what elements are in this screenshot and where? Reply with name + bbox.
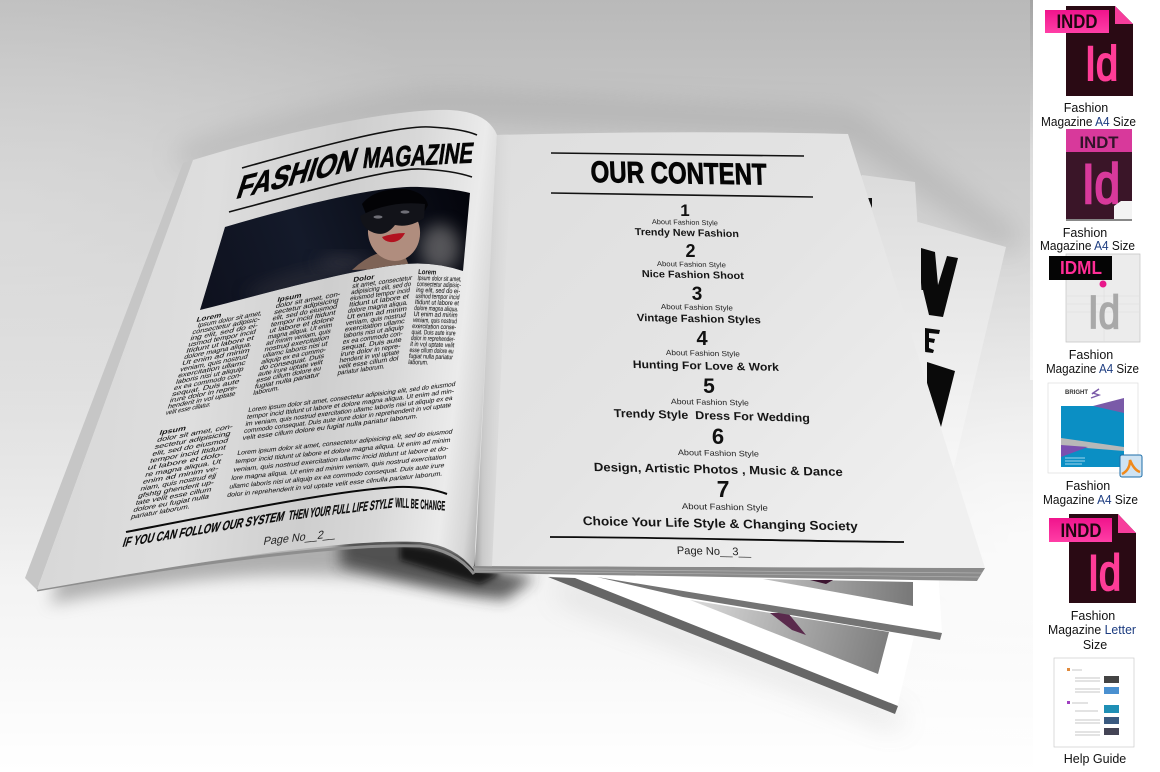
text column 1: Lorem — [195, 311, 223, 324]
text column 2 — [252, 283, 344, 397]
text column 2: tempor incid Itidunt — [270, 310, 336, 329]
text column 5: dolor sit amet, con- — [156, 423, 235, 444]
text column 4: quat. Duis aute irure — [411, 329, 456, 337]
label: IDML A4: Fashion — [1069, 348, 1113, 362]
label: help guide: Help Guide — [1064, 752, 1126, 766]
right page surface — [475, 132, 985, 568]
contents item 3: Vintage Fashion Styles — [637, 312, 761, 326]
text column 2: aute irure uptate velit — [257, 359, 323, 378]
contents item 3 — [637, 284, 761, 326]
contents item 1: Trendy New Fashion — [635, 227, 739, 240]
heading: Our Content: OUR CONTENT — [590, 156, 767, 192]
text column 1: consectetur adipisic- — [191, 316, 262, 336]
contents item 4: About Fashion Style — [666, 348, 740, 358]
text column 3: henderit in vol uptate — [339, 349, 400, 365]
icon: IDML file — [1049, 254, 1140, 342]
paragraph 2: lore magna aliqua. Ut enim ad minim veniam, quis nostrud exercitation — [230, 454, 448, 482]
text column 3: laboris nisi ut aliquip — [343, 324, 404, 340]
icon: PDF brochure — [1048, 383, 1142, 477]
paragraph 1: im veniam, quis nostrud exercitation ullamc laboris nisi ut aliquip ex ea — [245, 395, 454, 428]
icon: INDT file: Id — [1082, 152, 1120, 215]
icon: IDML file: IDML — [1060, 258, 1102, 278]
label: INDD letter: Magazine Letter — [1048, 623, 1136, 637]
text column 4: fugiat nulla pariatur — [409, 353, 454, 361]
heading rules — [551, 153, 804, 156]
drop shadows — [50, 104, 1015, 722]
bottom rule — [550, 537, 904, 542]
file list sidebar — [1040, 6, 1142, 766]
text column 5: enim ad minim ve- — [142, 465, 220, 486]
paragraph 2: tempor incid Itidunt ut labore et dolore magna aliqua. Ut enim ad minim — [235, 437, 451, 465]
text column 4: laborum. — [408, 359, 429, 367]
open magazine right page — [473, 132, 985, 581]
label: INDT A4: Fashion — [1063, 226, 1107, 240]
text column 1: usmod tempor incid — [187, 329, 257, 349]
text column 2: sectetur adipisicing — [273, 297, 340, 316]
tagline: THEN YOUR FULL LIFE STYLE — [287, 496, 394, 523]
contents item 6 — [593, 424, 844, 479]
back magazine: bottom copy — [548, 222, 1006, 714]
icon: help guide — [1054, 658, 1134, 747]
heading: Fashion Magazine: MAGAZINE — [361, 138, 476, 175]
text column 4: dolor in reprehender- — [411, 335, 455, 343]
back magazine: middle copy — [597, 175, 942, 640]
contents item 4: Hunting For Love & Work — [633, 359, 780, 374]
text column 5: elit, sed do eiusmod — [151, 438, 229, 458]
text column 4: consectetur adipisic- — [416, 281, 461, 289]
text column 3: pariatur laborum. — [337, 363, 385, 377]
text column 1: Ut enim ad minim — [181, 347, 251, 367]
text column 4: veniam, quis nostrud — [413, 317, 457, 325]
text column 1: dolore magna aliqua. — [183, 341, 253, 361]
label: INDD A4: Fashion — [1064, 101, 1108, 115]
sidebar background — [1030, 0, 1160, 772]
photo on middle copy — [763, 198, 913, 606]
heading: Fashion Magazine: FASHION — [233, 141, 362, 207]
contents item 4: 4 — [696, 328, 708, 350]
contents item 2: Nice Fashion Shoot — [642, 269, 745, 282]
photo: masked woman — [200, 186, 470, 310]
contents item 6: About Fashion Style — [678, 448, 760, 459]
text column 5: Ipsum — [158, 424, 188, 437]
text column 1: irure dolor in repre- — [169, 385, 239, 404]
text column 1 — [165, 302, 266, 417]
photo on bottom copy — [690, 600, 889, 674]
paragraph 1 — [242, 381, 456, 442]
text column 2: nostrud exercitation — [264, 334, 330, 354]
cover lettering on bottom copy — [921, 248, 958, 427]
bottom rule — [126, 487, 447, 532]
label: IDML A4: Magazine A4 Size — [1046, 362, 1139, 376]
text column 3: irure dolor in repre- — [340, 343, 401, 358]
open magazine left page: WILL BE CHANGE — [395, 495, 446, 513]
text column 4: exercitation conse- — [412, 323, 457, 331]
text column 4: Ut enim ad minim — [413, 311, 458, 319]
text column 5: ut labore et dolo- — [146, 451, 225, 472]
heading rules — [242, 127, 477, 168]
paragraph 2: ullamc laboris nisi ut aliquip ex ea commodo consequat. Duis aute irure — [228, 462, 446, 491]
text column 4: Ipsum dolor sit amet, — [417, 275, 462, 283]
right page thickness — [473, 566, 985, 581]
label: INDD letter — [1048, 609, 1136, 652]
contents item 3: About Fashion Style — [661, 302, 733, 312]
paragraph 1: velit esse cillum dolore eu fugiat nulla pariatur laborum. — [242, 413, 419, 442]
icon: INDD letter file — [1049, 514, 1136, 603]
label: INDD A4: Magazine A4 Size — [1041, 115, 1136, 129]
contents item 1: 1 — [680, 201, 690, 220]
text column 3: sit amet, consectetur — [352, 275, 413, 290]
contents item 7: 7 — [717, 476, 729, 502]
text column 2: elit, sed do eiusmod — [272, 303, 338, 323]
text column 3: dolore magna aliqua. — [347, 300, 408, 315]
text column 4: Itidunt ut labore et — [414, 299, 459, 307]
icon: IDML file: Id — [1088, 286, 1120, 338]
left page bottom thickness — [37, 546, 474, 590]
paragraph 2: veniam, quis nostrud exercitation ullamc incid Itidunt ut labore et do- — [232, 445, 449, 474]
text column 2: ad minim veniam, quis — [265, 328, 332, 347]
text column 3: sequat. Duis aute — [341, 337, 402, 352]
text column 1: sequat. Duis aute — [171, 378, 240, 398]
edge of bottom copy — [548, 577, 898, 714]
icon: INDD letter file: INDD — [1060, 521, 1102, 542]
text column 1: henderit in vol uptate — [167, 391, 236, 411]
icon: INDT file — [1066, 129, 1132, 221]
paragraph 1: tempor incid Itidunt ut labore et dolore magna aliqua. Ut enim ad min- — [246, 388, 455, 421]
text column 3: ex ea commodo con- — [342, 331, 403, 346]
text column 3: exercitation ullamc — [344, 318, 406, 334]
label: INDD letter: Size — [1083, 638, 1107, 652]
contents item 5: 5 — [703, 375, 715, 398]
paragraph 2: dolor in reprehenderit in vol uptate velit esse cilnulla pariatur laborum. — [226, 471, 443, 499]
text column 2: aliquip ex ea commo- — [260, 347, 327, 366]
text column 3: adipisicing elit, sed do — [351, 281, 412, 296]
text column 1: velit esse cillatur. — [165, 402, 212, 417]
text column 3: Dolor — [353, 272, 375, 284]
paragraph 1: Lorem ipsum dolor sit amet, consectetur adipisicing elit, sed do eiusmod — [248, 381, 456, 414]
text column 1: ex ea commodo con- — [173, 372, 243, 392]
text column 3: eiusmod tempor incid — [350, 287, 411, 303]
label: PDF A4 — [1043, 479, 1138, 507]
letter E — [925, 328, 940, 353]
contents item 2: 2 — [685, 241, 696, 261]
open magazine left page — [25, 110, 497, 590]
text column 2: laborum. — [252, 385, 280, 397]
contents item 6: Design, Artistic Photos , Music & Dance — [593, 460, 844, 479]
text column 4: ing elit, sed do ei- — [416, 287, 461, 295]
contents item 5 — [614, 375, 810, 425]
black triangle — [927, 362, 955, 427]
text column 3: Itidunt ut labore et — [348, 293, 410, 309]
text column 5 — [130, 415, 238, 521]
contents item 2 — [642, 241, 745, 282]
paragraph 1: commodo consequat. Duis aute irure dolor in reprehenderit in vol uptate — [243, 402, 452, 435]
text column 5: re magna aliqua. Ut — [144, 459, 222, 479]
text column 5: niam, quis nostrud ejj — [139, 473, 218, 493]
text column 2: do consequat. Duis — [259, 353, 326, 372]
text column 2: Ipsum — [277, 291, 303, 304]
tagline: IF YOU CAN FOLLOW OUR SYSTEM — [121, 508, 287, 550]
text column 1: exercitation ullamc — [177, 360, 247, 380]
contents item 5: About Fashion Style — [671, 397, 749, 408]
page number 3: Page No__3__ — [677, 545, 752, 558]
contents item 1 — [635, 201, 739, 240]
contents item 7 — [582, 476, 858, 533]
left page surface — [37, 110, 497, 590]
icon: INDD file: INDD — [1056, 12, 1098, 33]
text column 1: ing elit, sed do ei- — [189, 323, 260, 342]
label: INDT A4 — [1040, 226, 1135, 253]
icon: acrobat badge — [1120, 455, 1142, 477]
letter W — [921, 248, 958, 317]
left page side edge — [25, 160, 193, 590]
contents item 7: Choice Your Life Style & Changing Society — [582, 514, 858, 533]
text column 5: gfshtg ghenderit up- — [137, 479, 216, 500]
icon: INDD file — [1045, 6, 1133, 96]
text column 4: Lorem — [418, 269, 437, 277]
label: PDF A4: Magazine A4 Size — [1043, 493, 1138, 507]
label: INDT A4: Magazine A4 Size — [1040, 239, 1135, 253]
text column 3 — [337, 267, 415, 377]
label: IDML A4 — [1046, 348, 1139, 376]
text column 1: Ipsum dolor sit amet, — [197, 310, 263, 329]
icon: INDT file: INDT — [1080, 133, 1119, 152]
text column 4: dolore magna aliqua. — [414, 305, 459, 313]
text column 5: sectetur adipisicing — [154, 431, 232, 451]
edge of middle copy — [597, 577, 942, 640]
contents item 5: Trendy Style Dress For Wedding — [614, 408, 810, 425]
contents item 1: About Fashion Style — [652, 219, 718, 227]
heading: Fashion Magazine — [233, 138, 476, 207]
paragraph 2: Lorem ipsum dolor sit amet, consectetur adipisicing elit, sed do eiusmod — [237, 429, 454, 457]
contents item 6: 6 — [712, 424, 724, 449]
contents item 3: 3 — [692, 284, 702, 305]
text column 3: veniam, quis nostrud — [345, 312, 406, 327]
text column 2: fugiat nulla pariatur — [254, 371, 321, 391]
contents item 2: About Fashion Style — [657, 261, 726, 269]
icon: INDD letter file: Id — [1088, 545, 1121, 601]
text column 1: laboris nisi ut aliquip — [175, 366, 245, 386]
text column 2: ullamc laboris nisi ut — [262, 341, 328, 360]
text column 5: tate velit esse cillum — [135, 487, 213, 507]
label: INDD A4 — [1041, 101, 1136, 129]
paragraph 2 — [226, 429, 454, 499]
icon: PDF brochure: BRIGHT — [1065, 390, 1088, 396]
text column 1: Itidunt ut labore et — [185, 335, 255, 355]
text column 4: usmod tempor incid — [415, 293, 460, 301]
contents item 7: About Fashion Style — [682, 501, 768, 513]
text column 2: dolor sit amet, con- — [275, 291, 341, 310]
label: INDD letter: Fashion — [1071, 609, 1115, 623]
text column 2: magna aliqua. Ut enim — [267, 322, 333, 341]
text column 4: it in vol uptate velit — [410, 341, 455, 349]
text column 5: tempor incid Itidunt — [149, 445, 227, 465]
text column 2: ut labore et dolore — [268, 316, 335, 335]
text column 3: velit esse cillum dol — [338, 355, 399, 371]
text column 4: esse cillum dolore eu — [409, 347, 454, 355]
icon: INDD file: Id — [1085, 38, 1118, 91]
text column 1: veniam, quis nostrud — [179, 354, 249, 373]
text column 3: Ut enim ad minim — [346, 306, 408, 321]
text column 5: dolore eu fugiat nulla — [132, 494, 210, 514]
text column 2: esse cillum dolore eu — [256, 365, 322, 385]
contents item 4 — [633, 328, 780, 374]
label: PDF A4: Fashion — [1066, 479, 1110, 493]
text column 4 — [408, 269, 463, 367]
text column 5: pariatur laborum. — [130, 504, 191, 521]
page number 2: Page No__2__ — [262, 527, 337, 548]
